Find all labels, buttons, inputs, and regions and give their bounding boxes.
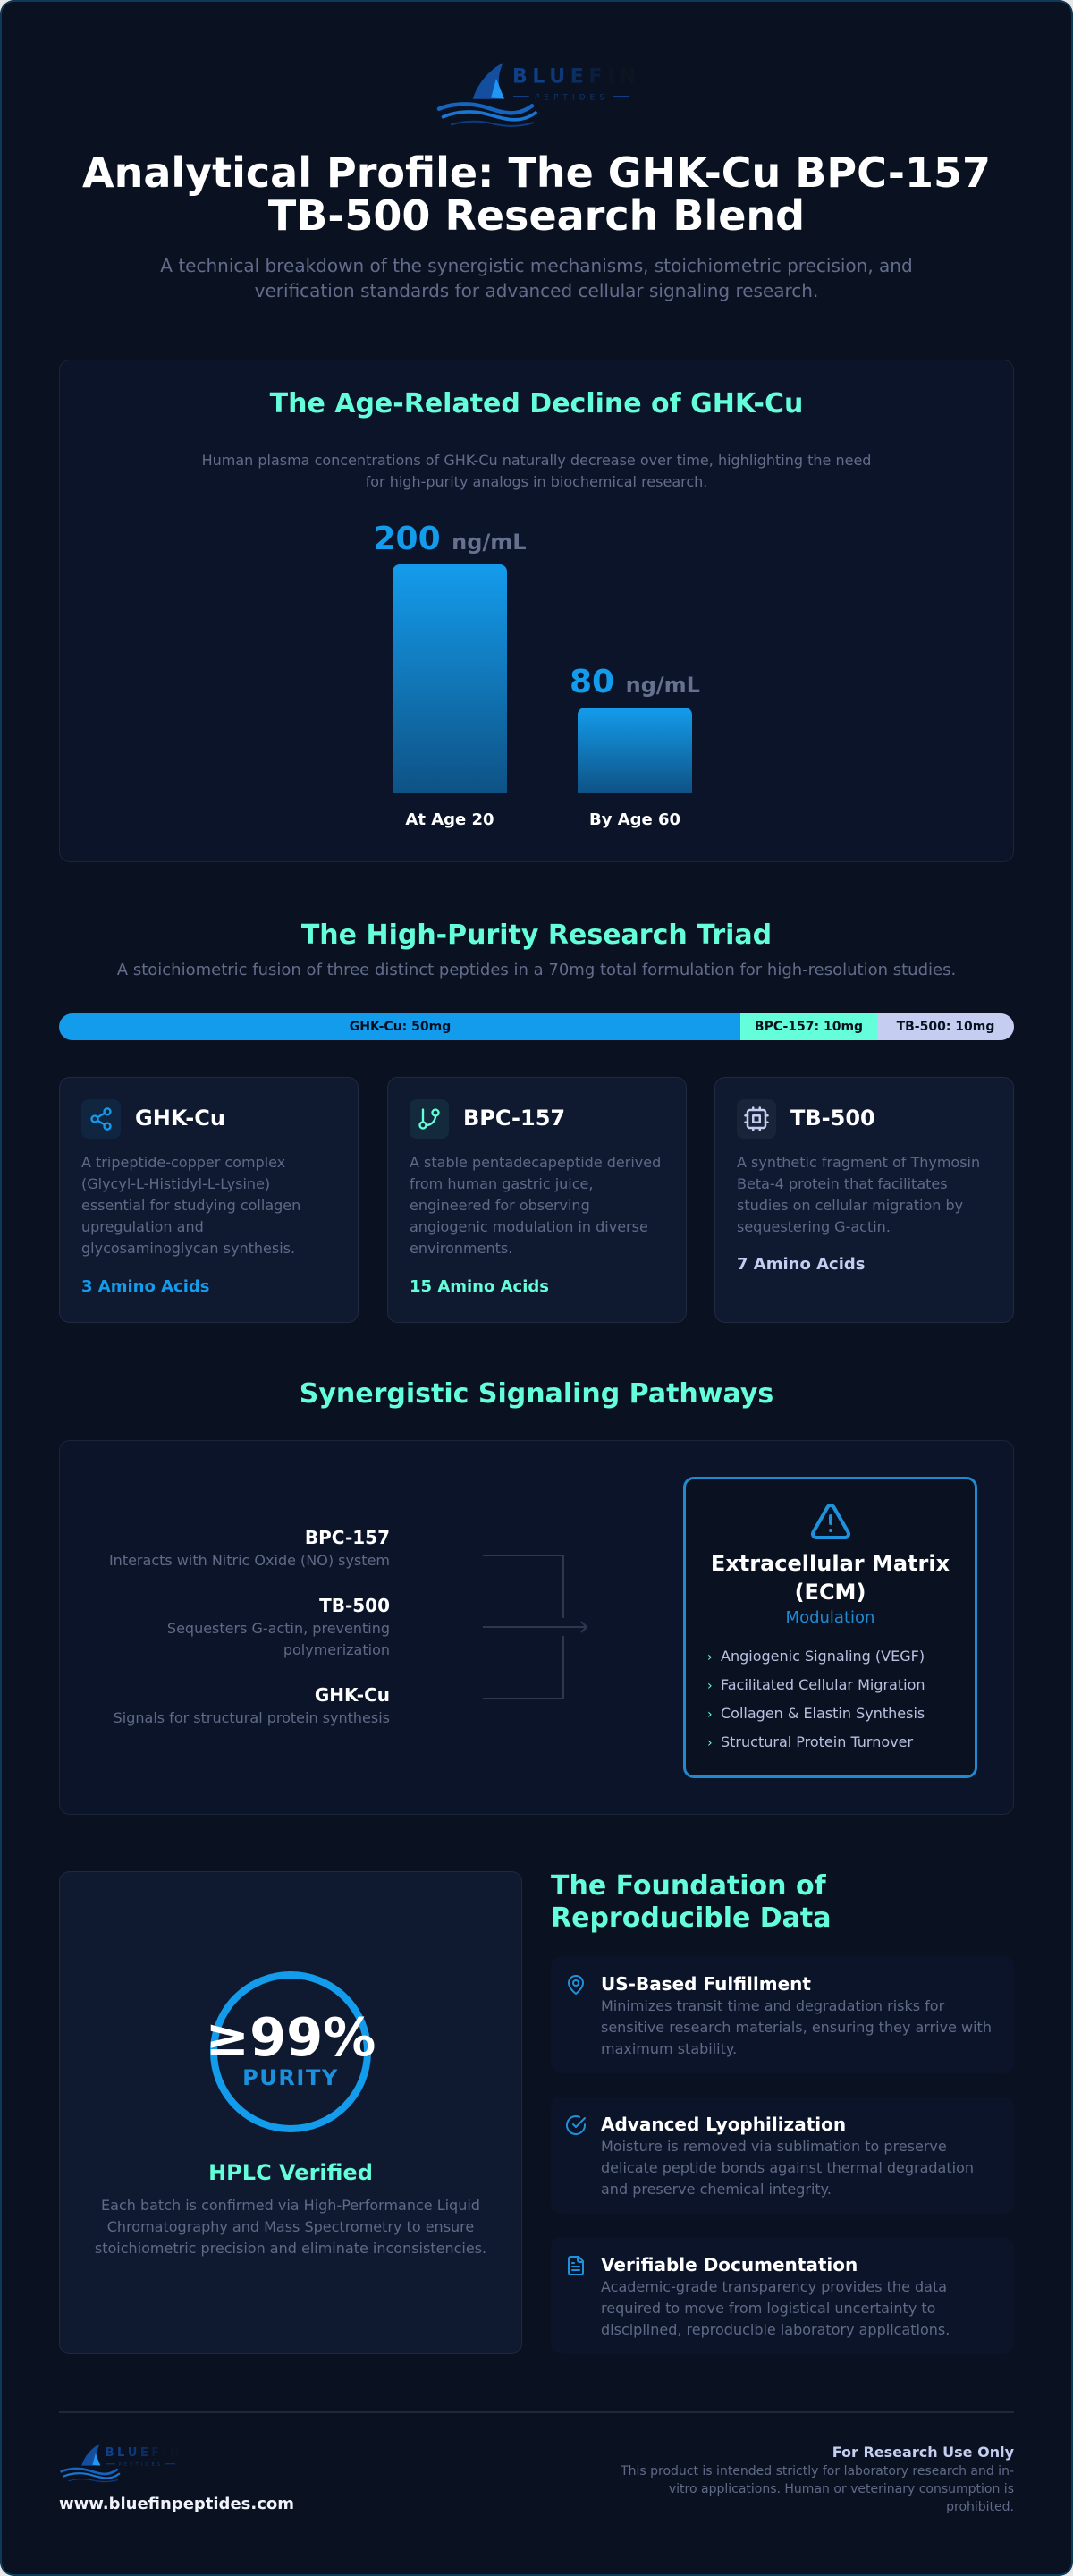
list item: › [707, 1736, 713, 1750]
input: GHK-Cu: GHK-Cu [315, 1684, 390, 1706]
feature description: required to move from logistical uncertainty to [601, 2300, 935, 2317]
input: BPC-157 [109, 1527, 390, 1569]
heading: triad: The High-Purity Research Triad [301, 919, 772, 951]
stacked bar: blend composition [59, 1013, 1014, 1040]
card description: environments. [410, 1240, 512, 1257]
card description: A synthetic fragment of Thymosin [737, 1154, 980, 1171]
list item: Collagen & Elastin Synthesis [721, 1705, 925, 1722]
input: TB-500: TB-500 [319, 1595, 390, 1616]
feature title: US-Based Fulfillment [601, 1973, 811, 1995]
input: GHK-Cu: Signals for structural protein synthesis [114, 1709, 390, 1726]
card: BPC-157 [387, 1077, 687, 1323]
input: BPC-157: BPC-157 [305, 1527, 390, 1548]
card description: (Glycyl-L-Histidyl-L-Lysine) [81, 1175, 270, 1192]
feature description: Minimizes transit time and degradation risks for [601, 1997, 944, 2014]
card description [737, 1154, 980, 1235]
verification description: Each batch is confirmed via High-Performance Liquid [101, 2197, 480, 2214]
card: TB-500 [714, 1077, 1014, 1323]
heading: foundation: Reproducible Data [551, 1902, 832, 1934]
box title: Extracellular Matrix [711, 1551, 950, 1576]
bar: age 60 [578, 708, 692, 793]
list item: › [707, 1650, 713, 1665]
icon: document [568, 2256, 584, 2275]
arrow: converging connector [483, 1555, 588, 1699]
footer: research use disclaimer [621, 2444, 1014, 2514]
subtitle: verification standards for advanced cellular signaling research. [255, 280, 818, 301]
bar chart: GHK-Cu plasma concentration [373, 521, 700, 829]
logo: Bluefin Peptides header: BLUEFIN [512, 66, 641, 89]
card: GHK-Cu [59, 1077, 359, 1323]
purity value: ≥99% [206, 2006, 376, 2068]
box subtitle: Modulation [786, 1608, 874, 1627]
heading: decline: The Age-Related Decline of GHK-Cu [270, 388, 803, 419]
box title [711, 1551, 950, 1605]
feature description [601, 1997, 992, 2057]
panel: age-related decline [59, 360, 1014, 862]
card description: A tripeptide-copper complex [81, 1154, 285, 1171]
value label: 80 ng/mL: 80 ng/mL [570, 664, 700, 700]
icon: branch [410, 1099, 449, 1139]
verification description [95, 2197, 486, 2257]
footer: website: www.bluefinpeptides.com [59, 2495, 294, 2513]
segment: GHK-Cu: GHK-Cu: 50mg [350, 1020, 451, 1034]
segment: TB-500: TB-500: 10mg [897, 1020, 994, 1034]
card description: from human gastric juice, [410, 1175, 593, 1192]
feature description: delicate peptide bonds against thermal degradation [601, 2159, 974, 2176]
panel: purity [59, 1871, 522, 2354]
disclaimer text: vitro applications. Human or veterinary consumption is [669, 2482, 1014, 2496]
title: TB-500 Research Blend [268, 191, 805, 240]
verification heading: HPLC Verified [208, 2160, 373, 2185]
card description: angiogenic modulation in diverse [410, 1218, 648, 1235]
card description [410, 1154, 661, 1257]
logo: Bluefin Peptides footer: PEPTIDES [119, 2462, 163, 2468]
disclaimer title: For Research Use Only [832, 2444, 1014, 2461]
panel: signaling pathways [59, 1440, 1014, 1815]
disclaimer text: This product is intended strictly for laboratory research and in- [621, 2464, 1014, 2479]
feature description [601, 2278, 950, 2338]
heading: foundation [551, 1870, 832, 1934]
list: outcomes [707, 1648, 925, 1750]
disclaimer text [621, 2464, 1014, 2514]
segment: BPC-157: BPC-157: 10mg [755, 1020, 863, 1034]
verification description: stoichiometric precision and eliminate inconsistencies. [95, 2240, 486, 2257]
description: decline: for high-purity analogs in biochemical research. [366, 473, 707, 490]
card title: TB-500 [790, 1106, 875, 1131]
feature: verifiable documentation [551, 2237, 1014, 2354]
subtitle [160, 255, 913, 301]
icon: share nodes [81, 1099, 121, 1139]
heading: pathways: Synergistic Signaling Pathways [300, 1378, 773, 1410]
amino acid count: 15 Amino Acids [410, 1277, 549, 1296]
subheading: triad: A stoichiometric fusion of three distinct peptides in a 70mg total formulation for high-resolution studies. [117, 961, 956, 979]
subtitle: A technical breakdown of the synergistic mechanisms, stoichiometric precision, and [160, 255, 913, 276]
card description: Beta-4 protein that facilitates [737, 1175, 948, 1192]
logo: Bluefin Peptides header [436, 63, 641, 127]
card description: upregulation and [81, 1218, 204, 1235]
list item: › [707, 1679, 713, 1693]
verification description: Chromatography and Mass Spectrometry to ensure [107, 2218, 474, 2235]
amino acid count: 3 Amino Acids [81, 1277, 209, 1296]
purity label: PURITY [242, 2065, 339, 2090]
disclaimer text: prohibited. [946, 2500, 1014, 2514]
heading: foundation: The Foundation of [551, 1870, 826, 1902]
icon: map pin [568, 1975, 584, 1995]
label: by age 60: By Age 60 [589, 810, 680, 829]
logo: Bluefin Peptides footer: BLUEFIN [106, 2446, 182, 2460]
card title: GHK-Cu [135, 1106, 225, 1131]
bar: age 20 [393, 564, 507, 793]
box: extracellular matrix [683, 1477, 977, 1778]
input: BPC-157: Interacts with Nitric Oxide (NO) system [109, 1552, 390, 1569]
list item: Facilitated Cellular Migration [721, 1676, 925, 1693]
segment: BPC-157 [740, 1013, 877, 1040]
title [82, 148, 991, 240]
card title: BPC-157 [463, 1106, 565, 1131]
icon: chip [737, 1099, 776, 1139]
input: TB-500: polymerization [283, 1641, 390, 1658]
feature description: and preserve chemical integrity. [601, 2181, 832, 2198]
card description: studies on cellular migration by [737, 1197, 963, 1214]
description: decline: Human plasma concentrations of GHK-Cu naturally decrease over time, highlighting the need [202, 452, 871, 469]
list item: Structural Protein Turnover [721, 1733, 913, 1750]
purity ring [210, 1971, 371, 2132]
feature description: sensitive research materials, ensuring they arrive with [601, 2019, 992, 2036]
card description [81, 1154, 300, 1257]
card description: A stable pentadecapeptide derived [410, 1154, 661, 1171]
input: TB-500: Sequesters G-actin, preventing [167, 1620, 390, 1637]
list item: › [707, 1707, 713, 1722]
value label: 200 ng/mL: 200 ng/mL [373, 521, 527, 557]
feature title: Advanced Lyophilization [601, 2114, 846, 2135]
segment: GHK-Cu [59, 1013, 741, 1040]
description: decline [202, 452, 871, 490]
feature title: Verifiable Documentation [601, 2254, 858, 2275]
pathway inputs [109, 1527, 390, 1726]
card description: engineered for observing [410, 1197, 590, 1214]
feature description: Moisture is removed via sublimation to preserve [601, 2138, 947, 2155]
segment: TB-500 [877, 1013, 1014, 1040]
feature: US-based fulfillment [551, 1956, 1014, 2073]
label: at age 20: At Age 20 [405, 810, 494, 829]
feature: advanced lyophilization [551, 2097, 1014, 2214]
icon: check circle [565, 2115, 586, 2135]
feature description [601, 2138, 974, 2198]
card description: essential for studying collagen [81, 1197, 300, 1214]
logo: Bluefin Peptides footer [60, 2444, 182, 2483]
icon: warning triangle [810, 1504, 850, 1539]
card description: glycosaminoglycan synthesis. [81, 1240, 295, 1257]
logo: Bluefin Peptides header: PEPTIDES [535, 94, 609, 103]
card description: sequestering G-actin. [737, 1218, 891, 1235]
list item: Angiogenic Signaling (VEGF) [721, 1648, 925, 1665]
title: Analytical Profile: The GHK-Cu BPC-157 [82, 148, 991, 197]
input: TB-500 [167, 1595, 390, 1658]
amino acid count: 7 Amino Acids [737, 1255, 865, 1274]
feature description: disciplined, reproducible laboratory applications. [601, 2321, 950, 2338]
box title: (ECM) [795, 1580, 866, 1605]
input: GHK-Cu [114, 1684, 390, 1726]
feature description: Academic-grade transparency provides the data [601, 2278, 947, 2295]
feature description: maximum stability. [601, 2040, 737, 2057]
